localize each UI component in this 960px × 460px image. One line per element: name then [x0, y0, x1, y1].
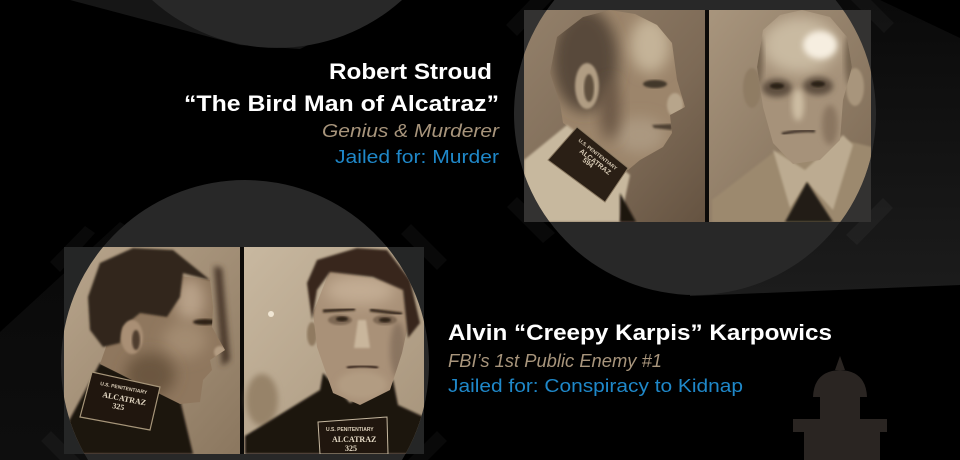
photo frame	[524, 10, 871, 222]
nickname: “The Bird Man of Alcatraz”	[184, 91, 499, 116]
ear	[575, 63, 599, 109]
inmate tag: 325	[112, 401, 125, 412]
icon: lighthouse tower	[793, 356, 887, 460]
name: Robert Stroud	[329, 59, 492, 84]
backdrop circle: upper right	[514, 0, 876, 295]
jacket	[64, 363, 193, 454]
front view	[712, 140, 872, 222]
photo frame	[64, 247, 424, 454]
hair	[88, 248, 210, 347]
text block: Alvin Karpowics	[448, 320, 832, 396]
backdrop circle: lower left	[61, 180, 429, 460]
crime: Jailed for: Conspiracy to Kidnap	[448, 376, 743, 396]
crime: Jailed for: Murder	[335, 147, 499, 167]
inmate tag	[548, 127, 628, 202]
backdrop circle: top	[152, 0, 402, 48]
photo content	[64, 247, 424, 454]
inmate tag	[80, 372, 160, 430]
name: Alvin “Creepy Karpis” Karpowics	[448, 320, 832, 345]
profile head	[100, 276, 225, 404]
mugshot: Robert Stroud	[524, 5, 872, 222]
ear	[121, 320, 143, 354]
inmate tag: 325	[345, 444, 357, 453]
text block: Robert Stroud	[184, 59, 500, 167]
inmate tag	[318, 417, 388, 454]
mugshot: Alvin Karpis	[64, 247, 424, 454]
inmate tag: 594	[581, 157, 594, 170]
inmate tag: U.S. PENITENTIARY	[577, 138, 618, 172]
front view	[246, 374, 278, 426]
inmate tag: U.S. PENITENTIARY	[326, 427, 374, 433]
inmate tag: ALCATRAZ	[332, 435, 376, 444]
descriptor: FBI’s 1st Public Enemy #1	[448, 351, 662, 371]
shirt	[524, 125, 630, 222]
profile head	[550, 10, 685, 170]
inmate tag: ALCATRAZ	[102, 390, 147, 407]
photo content	[524, 5, 872, 222]
inmate tag: ALCATRAZ	[578, 148, 612, 177]
inmate tag: U.S. PENITENTIARY	[100, 381, 148, 396]
descriptor: Genius & Murderer	[322, 121, 500, 141]
background mark	[214, 266, 230, 366]
